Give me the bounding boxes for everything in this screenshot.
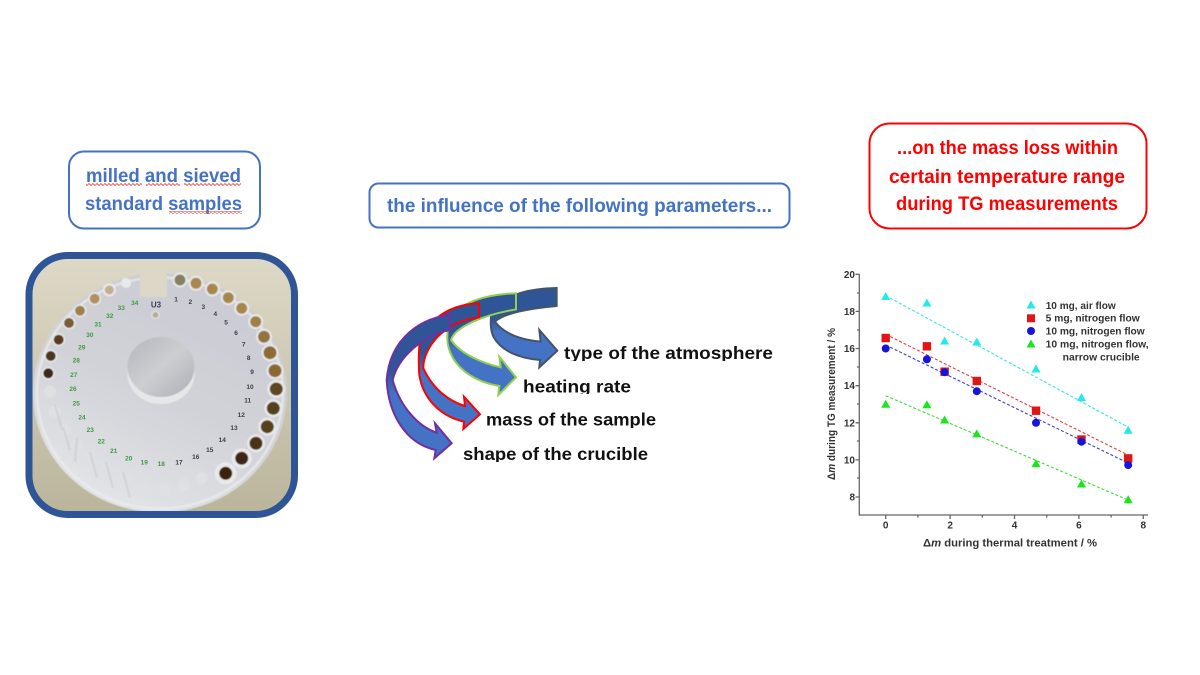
callout: the influence of the following parameters: the influence of the following parameters... — [387, 196, 772, 217]
arrow: type of the atmosphere — [491, 288, 557, 367]
legend: 10 mg, nitrogen flow, — [1046, 339, 1149, 350]
fit lines — [886, 296, 1128, 500]
series: 10 mg nitrogen flow — [882, 344, 1132, 469]
x tick labels: 6 — [1076, 520, 1082, 532]
position numbers: 13 — [230, 425, 238, 432]
series: 10 mg nitrogen flow narrow crucible — [881, 400, 1133, 503]
y tick labels: 10 — [844, 456, 855, 466]
position numbers: 25 — [73, 400, 80, 408]
axes — [856, 274, 1148, 519]
position numbers: 4 — [213, 311, 217, 318]
label: mass of the sample: mass of the sample — [486, 410, 656, 430]
callout: milled and sieved standard samples — [69, 152, 260, 228]
callout: on the mass loss within certain temperature range — [870, 124, 1146, 228]
position numbers: 2 — [188, 299, 192, 306]
scatter chart: mass loss — [826, 270, 1149, 550]
position numbers: 1 — [174, 296, 178, 304]
y tick labels: 12 — [844, 418, 855, 430]
position numbers: 15 — [206, 447, 214, 454]
position numbers: 26 — [69, 386, 77, 393]
position numbers: 8 — [247, 355, 251, 362]
arrow: heating rate — [447, 293, 516, 395]
x tick labels: 8 — [1141, 520, 1147, 532]
position numbers: 33 — [118, 305, 125, 312]
position numbers: 14 — [219, 437, 226, 444]
infographic canvas — [26, 122, 1148, 549]
position numbers: 18 — [158, 461, 165, 468]
curved arrows diagram — [387, 288, 557, 458]
position numbers: 17 — [175, 460, 183, 466]
position numbers: 11 — [244, 398, 252, 404]
y tick labels: 16 — [844, 344, 855, 355]
callout: on the mass loss within certain temperature range: certain temperature range — [889, 167, 1125, 188]
y tick labels — [844, 270, 855, 504]
empty sample positions — [55, 406, 130, 498]
arrow: shape of the crucible — [387, 315, 452, 458]
label: type of the atmosphere: type of the atmosphere — [564, 343, 773, 363]
position numbers: 6 — [234, 330, 238, 337]
callout: milled and sieved standard samples: standard samples — [85, 194, 242, 215]
position numbers: 30 — [86, 332, 94, 339]
position numbers: 20 — [125, 456, 133, 462]
callout: milled and sieved standard samples: milled and sieved — [86, 166, 241, 187]
position numbers: 24 — [78, 414, 86, 422]
x tick labels — [883, 520, 1147, 532]
position numbers: 3 — [201, 304, 205, 311]
position numbers: 22 — [98, 438, 105, 446]
y axis title: Δm during TG measurement / % — [826, 328, 838, 480]
position numbers: 27 — [70, 372, 78, 379]
y tick labels: 14 — [844, 381, 855, 392]
x tick labels: 4 — [1012, 520, 1018, 532]
y tick labels: 18 — [844, 307, 855, 318]
position numbers: 34 — [131, 300, 139, 307]
position numbers: 32 — [106, 313, 114, 320]
callout: on the mass loss within certain temperature range: ...on the mass loss within — [897, 138, 1118, 159]
position numbers: 16 — [192, 454, 200, 461]
filled sample wells — [42, 272, 285, 484]
legend: 10 mg, air flow — [1046, 301, 1116, 312]
photo: sample carousel in rounded frame — [26, 252, 298, 518]
position numbers: 23 — [87, 427, 94, 434]
position numbers: 19 — [141, 460, 148, 466]
x tick labels: 0 — [883, 520, 889, 532]
position numbers: 12 — [238, 412, 245, 419]
position numbers: 21 — [110, 448, 118, 455]
position numbers — [69, 296, 254, 468]
position numbers: U3 — [151, 300, 162, 310]
label: shape of the crucible: shape of the crucible — [463, 444, 648, 464]
label: heating rate: heating rate — [523, 376, 631, 396]
arrow: mass of the sample — [419, 303, 480, 429]
position numbers: 31 — [94, 322, 102, 328]
callout: on the mass loss within certain temperature range: during TG measurements — [896, 194, 1118, 215]
position numbers: 10 — [246, 384, 254, 391]
x tick labels: 2 — [947, 520, 953, 532]
series: 5 mg nitrogen flow — [882, 334, 1132, 463]
callout: the influence of the following parameters — [370, 184, 790, 228]
position numbers: 9 — [250, 369, 254, 376]
legend: narrow crucible — [1063, 353, 1140, 364]
series: 10 mg air flow — [881, 292, 1133, 434]
center hub — [128, 337, 194, 404]
legend: 10 mg, nitrogen flow — [1046, 326, 1145, 337]
position numbers: 5 — [224, 320, 228, 326]
x axis title: Δm during thermal treatment / % — [923, 538, 1097, 550]
y tick labels: 8 — [849, 492, 855, 504]
legend — [1026, 300, 1149, 364]
position numbers: 28 — [73, 358, 80, 364]
y tick labels: 20 — [844, 270, 855, 281]
position numbers: 7 — [242, 342, 246, 348]
legend: 5 mg, nitrogen flow — [1046, 314, 1140, 325]
position numbers: 29 — [78, 344, 86, 352]
